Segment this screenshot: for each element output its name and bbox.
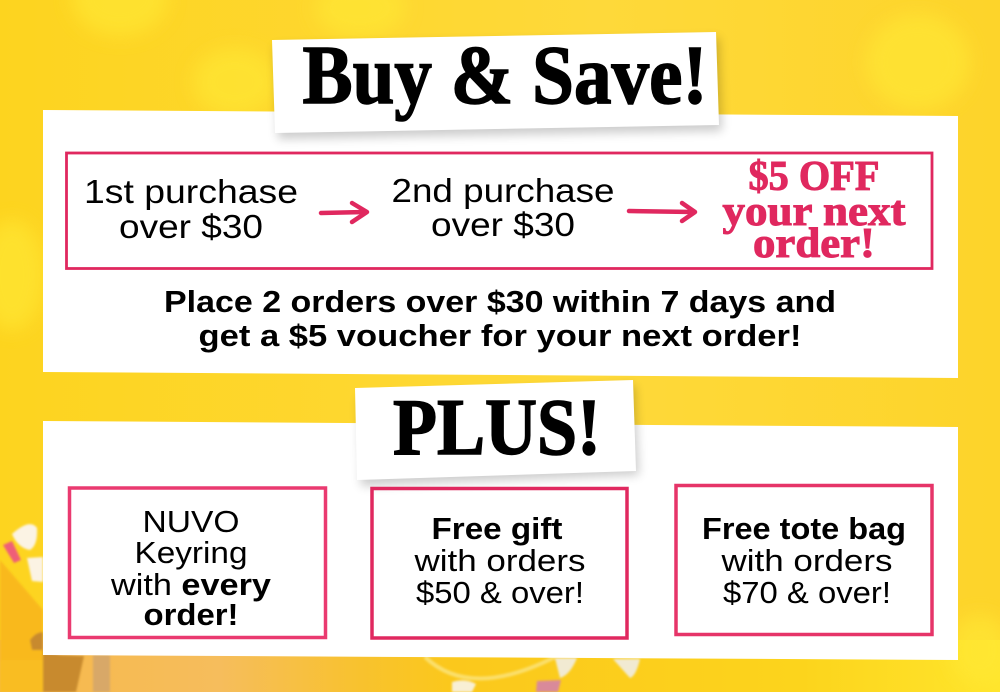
text: offer description: get a $5 voucher for your next order! [198,318,802,353]
text: offer description: Place 2 orders over $30 within 7 days and [164,284,836,319]
offer box: free tote bag [676,486,932,634]
text: offer description [164,284,836,353]
arrow: second purchase to reward [629,203,695,221]
reward: five dollars off: $5 OFF [748,154,880,200]
title card: plus [355,380,639,486]
offer box: keyring: NUVO [142,504,240,539]
offer box: free tote bag: Free tote bag [702,511,906,546]
offer box: keyring: order! [144,597,238,632]
step: second purchase [392,172,614,243]
offer box: free tote bag: $70 & over! [723,575,891,610]
step: second purchase: 2nd purchase [392,172,614,209]
title card: buy and save [272,29,722,139]
offer box: free tote bag: with orders [720,543,892,578]
heading: Buy & Save! [302,29,708,122]
offer box: keyring: Keyring [134,535,248,570]
offer box: keyring [70,488,326,638]
reward: five dollars off: your next [722,189,906,235]
arrow: first to second purchase [321,203,367,222]
panel: buy and save [43,110,958,378]
offer box: free gift [372,488,627,638]
reward: five dollars off: order! [753,221,875,267]
offer box: free gift: $50 & over! [416,575,584,610]
offer box: free gift: with orders [413,543,586,578]
reward: five dollars off [722,154,906,267]
step: second purchase: over $30 [431,206,575,243]
step: first purchase [84,173,298,245]
offer box: free gift: Free gift [432,511,562,546]
panel: plus offers [43,421,958,660]
offer box: keyring: with every [110,567,272,602]
decoration: party items at the bottom [0,524,640,692]
heading: PLUS! [393,384,601,472]
step: first purchase: over $30 [119,208,263,245]
red frame: purchase steps [66,153,932,268]
step: first purchase: 1st purchase [84,173,298,210]
